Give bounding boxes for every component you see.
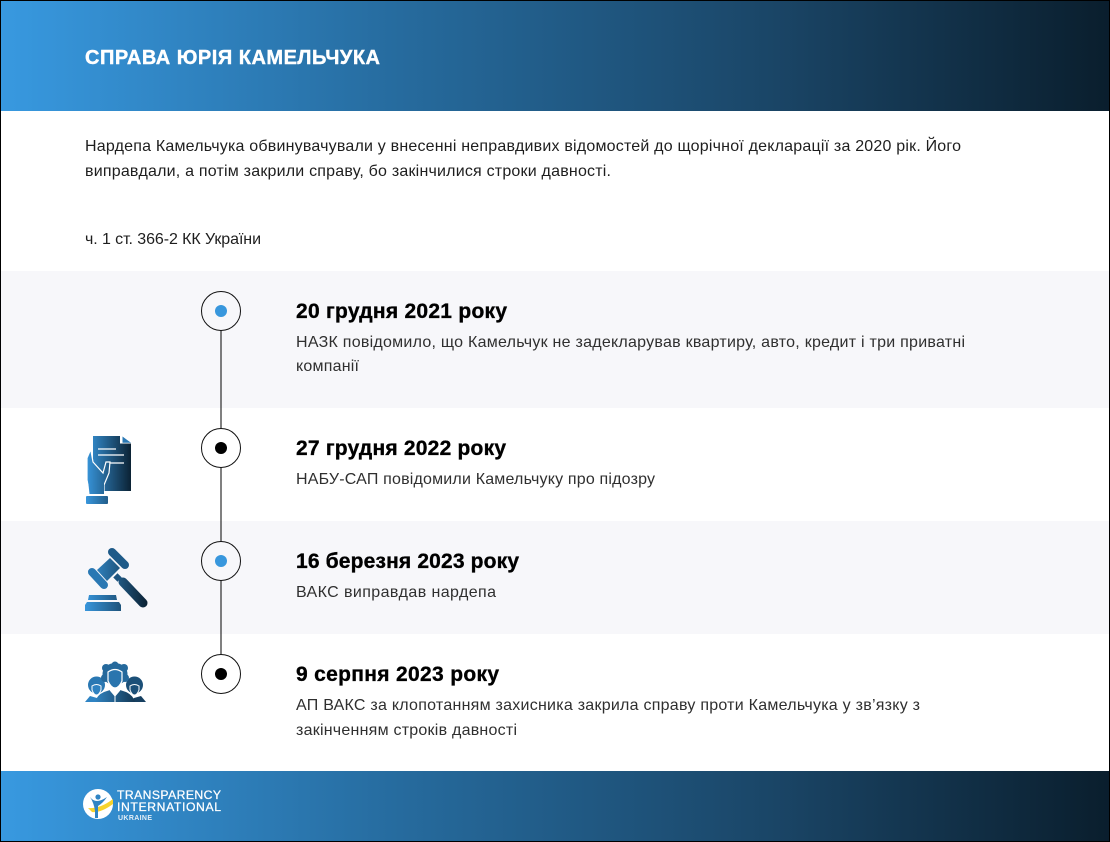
event 4 bbox=[296, 663, 920, 739]
header band bbox=[0, 0, 1110, 111]
event 4: АП ВАКС за клопотанням захисника закрила справу проти Камельчука у зв’язку з bbox=[296, 697, 920, 714]
title: СПРАВА ЮРІЯ КАМЕЛЬЧУКА bbox=[85, 47, 380, 69]
timeline marker 4 bbox=[202, 654, 240, 694]
icon: gavel bbox=[85, 552, 143, 611]
event 1: компанії bbox=[296, 358, 360, 375]
event 1 bbox=[296, 300, 965, 375]
icon: group of people bbox=[85, 662, 146, 702]
logo: Transparency International Ukraine: UKRAINE bbox=[118, 815, 152, 822]
logo: Transparency International Ukraine: INTERNATIONAL bbox=[117, 800, 221, 814]
intro text: Нардепа Камельчука обвинувачували у внесенні неправдивих відомостей до щорічної декларації за 2020 рік. Його bbox=[85, 136, 961, 155]
event 1: НАЗК повідомило, що Камельчук не задекларував квартиру, авто, кредит і три приватні bbox=[296, 334, 965, 351]
event 2 bbox=[296, 437, 655, 488]
event 3: ВАКС виправдав нардепа bbox=[296, 584, 496, 601]
event 4: закінченням строків давності bbox=[296, 722, 517, 739]
intro text bbox=[85, 136, 961, 180]
timeline marker 1 bbox=[202, 292, 240, 330]
event 4: 9 серпня 2023 року bbox=[296, 663, 499, 686]
footer band bbox=[0, 771, 1110, 842]
icon: hand with document bbox=[86, 436, 131, 504]
event 3 bbox=[296, 550, 519, 601]
event 1: 20 грудня 2021 року bbox=[296, 300, 507, 323]
timeline line bbox=[220, 311, 222, 674]
logo: Transparency International Ukraine bbox=[83, 788, 221, 822]
event 2: НАБУ-САП повідомили Камельчуку про підозру bbox=[296, 471, 655, 488]
row backgrounds bbox=[0, 271, 1110, 634]
event 2: 27 грудня 2022 року bbox=[296, 437, 506, 460]
intro text: виправдали, а потім закрили справу, бо закінчилися строки давності. bbox=[85, 163, 611, 180]
timeline marker 3 bbox=[202, 542, 240, 580]
legal reference: ч. 1 ст. 366-2 КК України bbox=[85, 231, 261, 248]
event 3: 16 березня 2023 року bbox=[296, 550, 519, 573]
logo: Transparency International Ukraine: TRANSPARENCY bbox=[117, 788, 221, 802]
timeline marker 2 bbox=[202, 428, 240, 468]
